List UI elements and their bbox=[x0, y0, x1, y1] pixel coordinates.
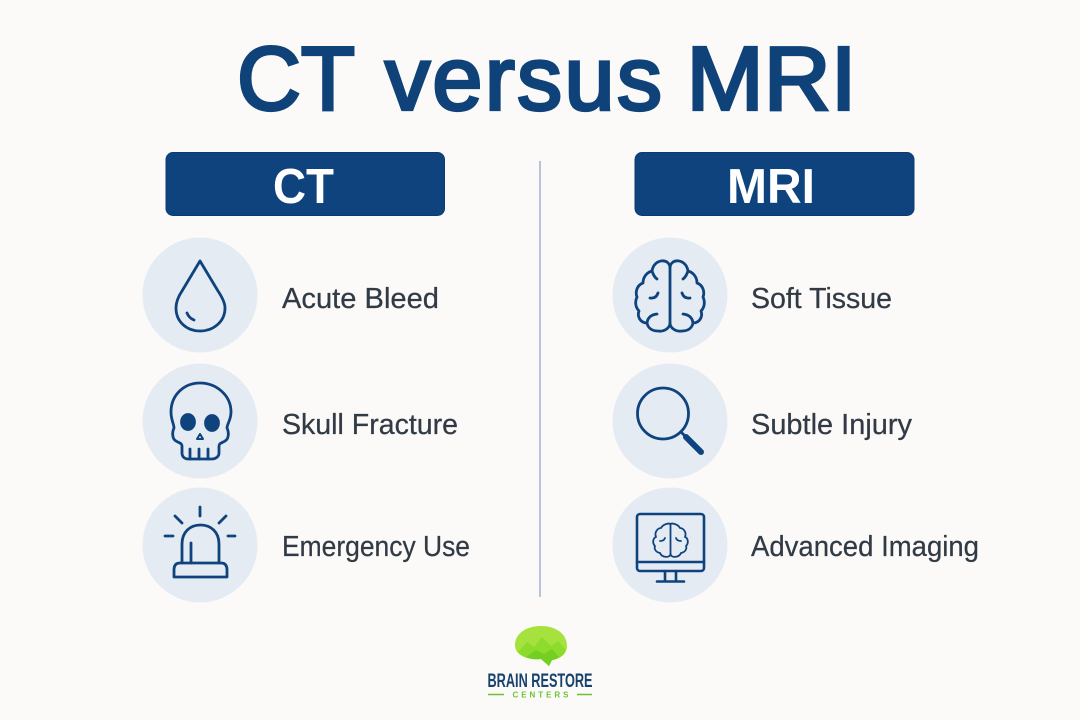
center divider bbox=[539, 161, 541, 597]
title: versus bbox=[385, 30, 662, 130]
icon: water drop bbox=[176, 261, 225, 331]
MRI header: MRI bbox=[727, 160, 815, 214]
item: Skull Fracture: Skull Fracture bbox=[282, 409, 458, 441]
item: Subtle Injury bbox=[612, 364, 912, 478]
item: Acute Bleed: Acute Bleed bbox=[282, 283, 439, 315]
title: MRI bbox=[686, 30, 856, 130]
title: CT bbox=[237, 30, 355, 130]
icon: magnifying glass bbox=[638, 388, 701, 452]
icon: skull bbox=[171, 383, 231, 459]
MRI header bbox=[635, 152, 914, 216]
item: Acute Bleed bbox=[142, 238, 439, 352]
logo: Brain Restore Centers bbox=[488, 626, 592, 700]
item: Advanced Imaging: Advanced Imaging bbox=[751, 531, 979, 563]
icon: brain bbox=[636, 261, 704, 331]
logo: Brain Restore Centers: CENTERS bbox=[512, 690, 569, 700]
icon: green brain bbox=[515, 626, 567, 666]
item: Subtle Injury: Subtle Injury bbox=[751, 409, 912, 441]
CT header: CT bbox=[273, 160, 334, 214]
CT header bbox=[166, 152, 444, 216]
item: Skull Fracture bbox=[142, 364, 458, 478]
icon: monitor with brain bbox=[637, 514, 704, 582]
logo: Brain Restore Centers: BRAIN RESTORE bbox=[488, 670, 592, 692]
item: Soft Tissue: Soft Tissue bbox=[751, 283, 892, 315]
item: Advanced Imaging bbox=[612, 488, 979, 602]
item: Emergency Use bbox=[142, 488, 470, 602]
icon: siren bbox=[165, 507, 235, 577]
title bbox=[237, 30, 856, 130]
item: Emergency Use: Emergency Use bbox=[282, 531, 470, 563]
item: Soft Tissue bbox=[612, 238, 892, 352]
